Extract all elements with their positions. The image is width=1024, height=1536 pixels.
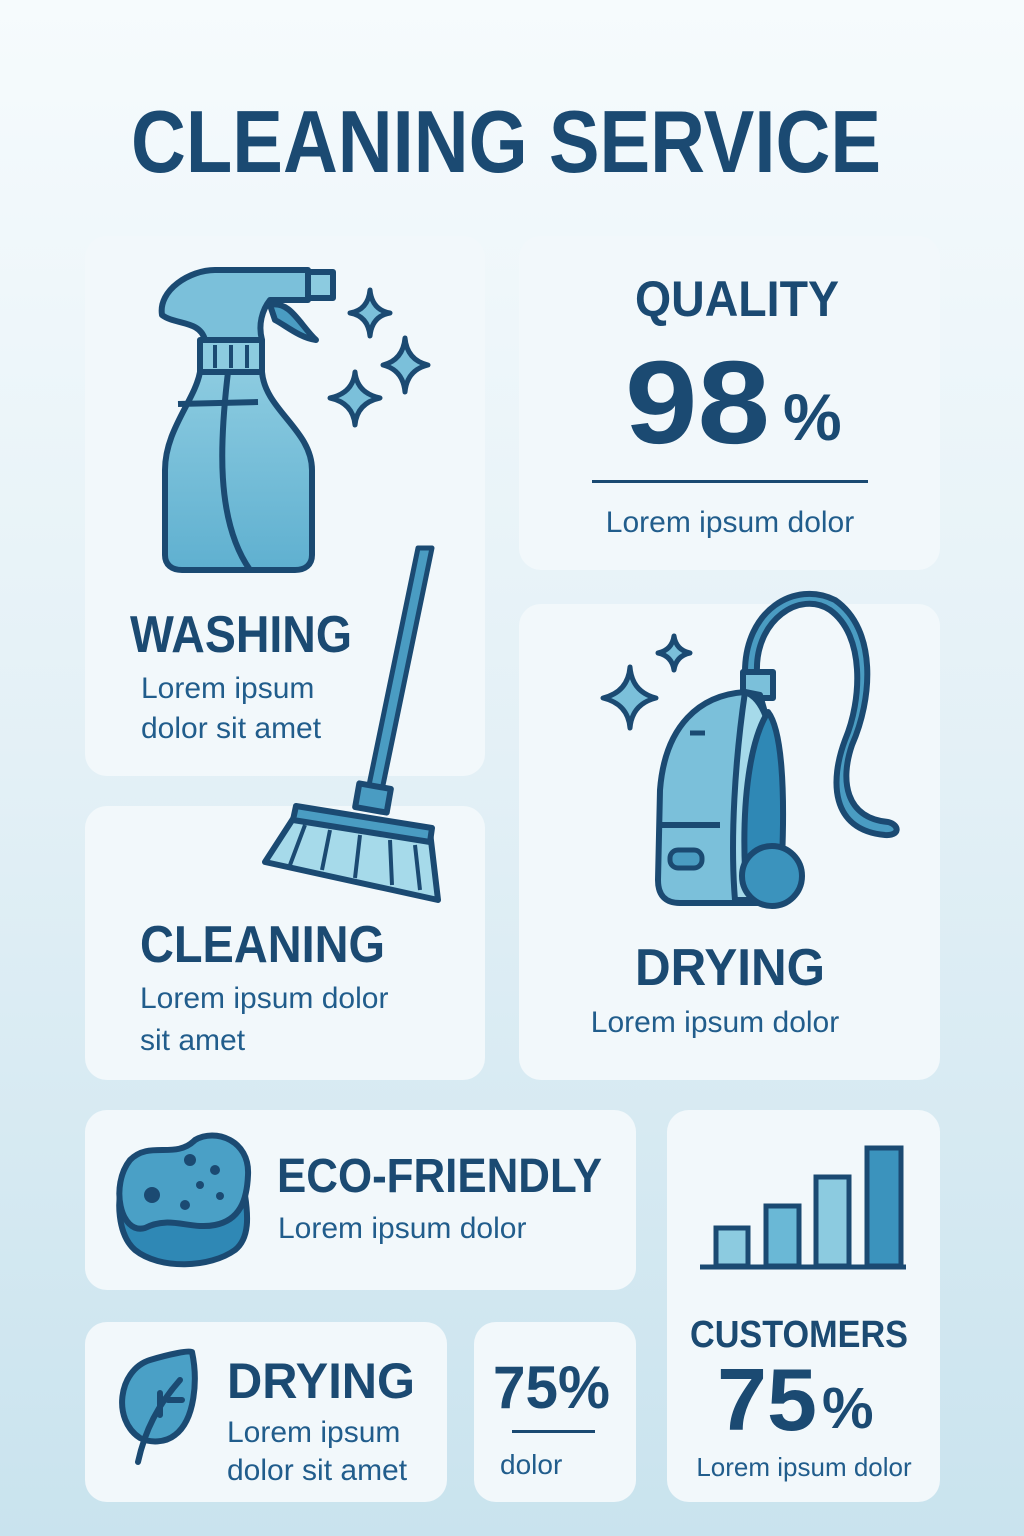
panel: cleaning — [85, 806, 485, 1080]
text: customers: Lorem ipsum dolor — [696, 1452, 912, 1482]
title: CLEANING SERVICE — [131, 92, 881, 191]
panel: customers: % — [822, 1376, 874, 1441]
heading: drying: DRYING — [227, 1353, 415, 1409]
panel: eco-friendly — [85, 1110, 636, 1290]
panel: customers — [667, 1110, 940, 1502]
panel: quality: % — [783, 380, 842, 454]
heading: washing: WASHING — [130, 606, 352, 664]
icon: sponge — [119, 1135, 248, 1264]
panel: drying leaf — [85, 1322, 447, 1502]
text: eco: Lorem ipsum dolor — [278, 1212, 526, 1245]
icon: leaf — [122, 1351, 195, 1462]
icon: sparkles — [603, 636, 690, 728]
panel: small stat — [474, 1322, 636, 1502]
chart: bars — [700, 1148, 906, 1267]
heading: quality: QUALITY — [635, 271, 839, 327]
text: washing: Lorem ipsum — [141, 672, 314, 705]
text: cleaning: Lorem ipsum dolor — [140, 982, 388, 1015]
stat: 75%: 75% — [493, 1354, 610, 1421]
text: washing: dolor sit amet — [141, 712, 322, 745]
icon: broom — [265, 548, 438, 900]
text: drying leaf: Lorem ipsum — [227, 1416, 400, 1449]
panel: washing — [85, 236, 485, 776]
heading: cleaning: CLEANING — [140, 916, 385, 974]
panel: drying vacuum — [519, 594, 940, 1080]
text: drying: Lorem ipsum dolor — [591, 1006, 839, 1039]
icon: spray bottle — [162, 270, 333, 570]
text: cleaning: sit amet — [140, 1024, 246, 1057]
icon: sparkles — [330, 290, 428, 425]
text: drying leaf: dolor sit amet — [227, 1454, 408, 1487]
text: dolor: dolor — [500, 1449, 562, 1480]
stat: 75%: 75 — [717, 1350, 817, 1449]
panel: quality — [519, 236, 940, 570]
text: quality: Lorem ipsum dolor — [606, 506, 854, 539]
heading: drying: DRYING — [635, 939, 825, 997]
heading: eco-friendly: ECO-FRIENDLY — [277, 1150, 602, 1203]
stat: 98%: 98 — [625, 337, 770, 469]
heading: customers: CUSTOMERS — [690, 1314, 908, 1356]
icon: vacuum — [658, 594, 897, 906]
